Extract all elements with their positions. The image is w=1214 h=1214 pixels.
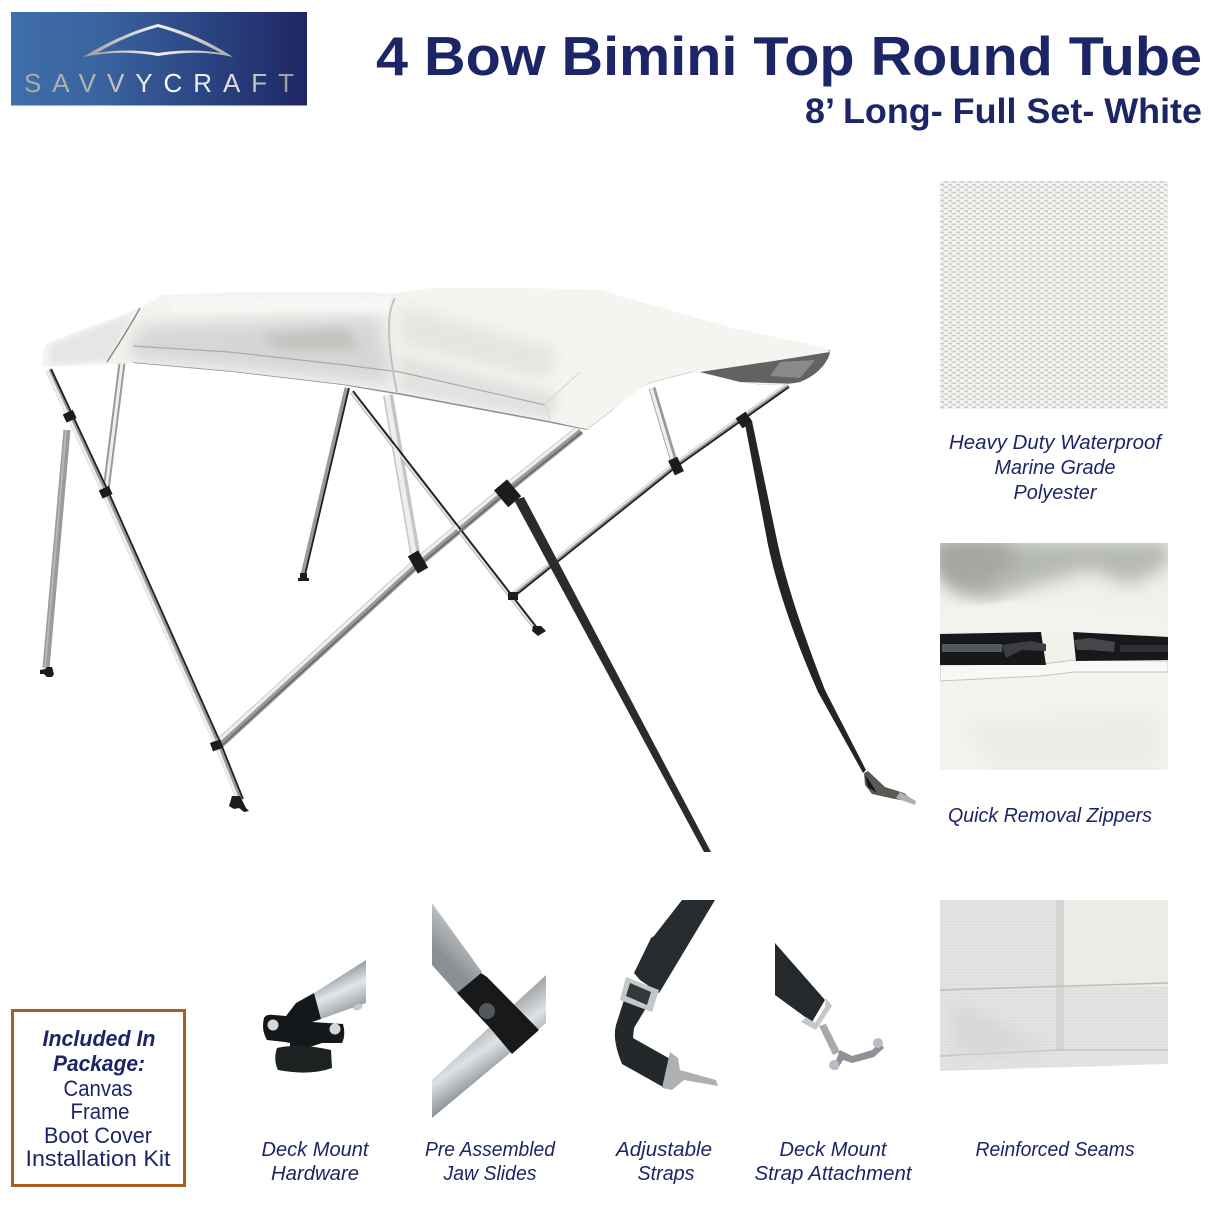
caption: Hardware — [271, 1162, 359, 1185]
feature: strap attachment — [754, 943, 913, 1185]
photo: strap with snap — [775, 943, 884, 1070]
contents list: Boot Cover — [44, 1123, 152, 1148]
strap hook — [864, 771, 916, 805]
caption — [614, 1138, 712, 1185]
bold heading: Included In — [42, 1026, 156, 1051]
icon: roof mark — [83, 24, 233, 57]
frame tubes — [45, 363, 789, 800]
caption — [262, 1138, 370, 1185]
caption: Polyester — [1014, 481, 1098, 504]
feature: reinforced seams — [940, 900, 1168, 1161]
bold heading — [42, 1026, 156, 1076]
caption: Marine Grade — [994, 456, 1116, 479]
feature: deck mount hardware — [262, 960, 370, 1185]
package contents box — [12, 1010, 184, 1186]
caption — [425, 1138, 556, 1185]
feature: zippers — [935, 540, 1170, 827]
caption: Deck Mount — [780, 1138, 888, 1161]
contents list: Frame — [70, 1099, 130, 1124]
photo: zipper — [935, 540, 1170, 770]
photo: deck mount — [263, 960, 366, 1073]
canopy underside — [690, 350, 830, 385]
contents list: Canvas — [64, 1076, 132, 1101]
caption: Straps — [638, 1162, 694, 1185]
caption — [754, 1138, 913, 1185]
photo: jaw slide — [432, 903, 546, 1118]
feature: jaw slides — [425, 903, 556, 1185]
logo wordmark: SAVVYCRAFT — [24, 68, 294, 98]
photo: seams — [940, 900, 1168, 1072]
caption: Heavy Duty Waterproof — [949, 431, 1163, 454]
caption: Deck Mount — [262, 1138, 370, 1161]
caption: Reinforced Seams — [976, 1138, 1134, 1161]
strap: rear — [745, 421, 866, 773]
caption: Strap Attachment — [754, 1162, 913, 1185]
photo: fabric weave — [940, 181, 1168, 409]
frame joints and feet — [40, 410, 752, 812]
logo: Savvycraft — [11, 12, 307, 106]
contents list: Installation Kit — [26, 1146, 170, 1171]
title: 4 Bow Bimini Top Round Tube — [376, 25, 1202, 87]
bold heading: Package: — [53, 1051, 145, 1076]
feature: polyester fabric — [940, 181, 1168, 504]
feature: adjustable straps — [614, 900, 718, 1185]
photo: strap — [615, 900, 718, 1090]
caption: Pre Assembled — [425, 1138, 556, 1161]
subtitle: 8’ Long- Full Set- White — [805, 92, 1202, 131]
caption: Quick Removal Zippers — [948, 804, 1152, 827]
strap: front — [514, 497, 711, 852]
canopy — [40, 285, 835, 435]
main photo: bimini top — [40, 285, 916, 852]
caption — [949, 431, 1163, 504]
caption: Jaw Slides — [443, 1162, 536, 1185]
contents list — [26, 1076, 170, 1171]
caption: Adjustable — [614, 1138, 712, 1161]
